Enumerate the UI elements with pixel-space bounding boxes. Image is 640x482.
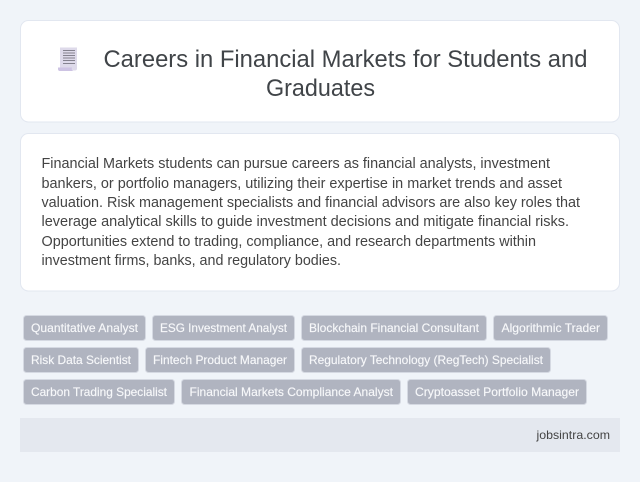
tag: Carbon Trading Specialist: Carbon Trading Specialist xyxy=(31,385,168,399)
footer bar xyxy=(20,418,620,452)
text block: description xyxy=(42,156,580,269)
tag: Cryptoasset Portfolio Manager: Cryptoasset Portfolio Manager xyxy=(415,385,579,399)
tag list xyxy=(24,316,608,404)
tag: Fintech Product Manager xyxy=(146,348,294,372)
panel: description xyxy=(20,134,620,291)
text block: description: leverage analytical skills to guide investment decisions and mitigate financial risks. xyxy=(42,214,569,230)
tag: Regulatory Technology (RegTech) Specialist: Regulatory Technology (RegTech) Specialist xyxy=(309,353,544,367)
tag: Carbon Trading Specialist xyxy=(24,380,174,404)
tag: Quantitative Analyst: Quantitative Analyst xyxy=(31,321,139,335)
tag: Financial Markets Compliance Analyst: Financial Markets Compliance Analyst xyxy=(190,385,394,399)
tag: ESG Investment Analyst: ESG Investment Analyst xyxy=(160,321,288,335)
tag: Risk Data Scientist: Risk Data Scientist xyxy=(31,353,132,367)
tag: Blockchain Financial Consultant xyxy=(302,316,486,340)
text block: description: Opportunities extend to trading, compliance, and research departments within xyxy=(42,234,536,250)
tag: Financial Markets Compliance Analyst xyxy=(182,380,400,404)
panel: title card xyxy=(20,20,620,122)
tag: Fintech Product Manager: Fintech Product Manager xyxy=(153,353,287,367)
heading xyxy=(104,46,588,102)
text block: description: investment firms, banks, and regulatory bodies. xyxy=(42,253,341,269)
tag: Regulatory Technology (RegTech) Specialist xyxy=(302,348,550,372)
tag: ESG Investment Analyst xyxy=(152,316,294,340)
tag: Risk Data Scientist xyxy=(24,348,138,372)
text block: description: valuation. Risk management specialists and financial advisors are also key roles that xyxy=(42,195,580,211)
tag: Quantitative Analyst xyxy=(24,316,146,340)
tag: Algorithmic Trader xyxy=(494,316,608,340)
footer text: source: jobsintra.com xyxy=(535,428,610,442)
icon: paper receipt scroll xyxy=(58,48,77,71)
text block: description: Financial Markets students can pursue careers as financial analysts, investment xyxy=(42,156,550,172)
text block: description: bankers, or portfolio managers, utilizing their expertise in market trends and asset xyxy=(42,176,562,192)
heading: Careers in Financial Markets for Students and xyxy=(104,46,588,73)
tag: Blockchain Financial Consultant: Blockchain Financial Consultant xyxy=(309,321,480,335)
heading: Graduates xyxy=(266,75,375,102)
tag: Cryptoasset Portfolio Manager xyxy=(408,380,586,404)
tag: Algorithmic Trader: Algorithmic Trader xyxy=(502,321,600,335)
